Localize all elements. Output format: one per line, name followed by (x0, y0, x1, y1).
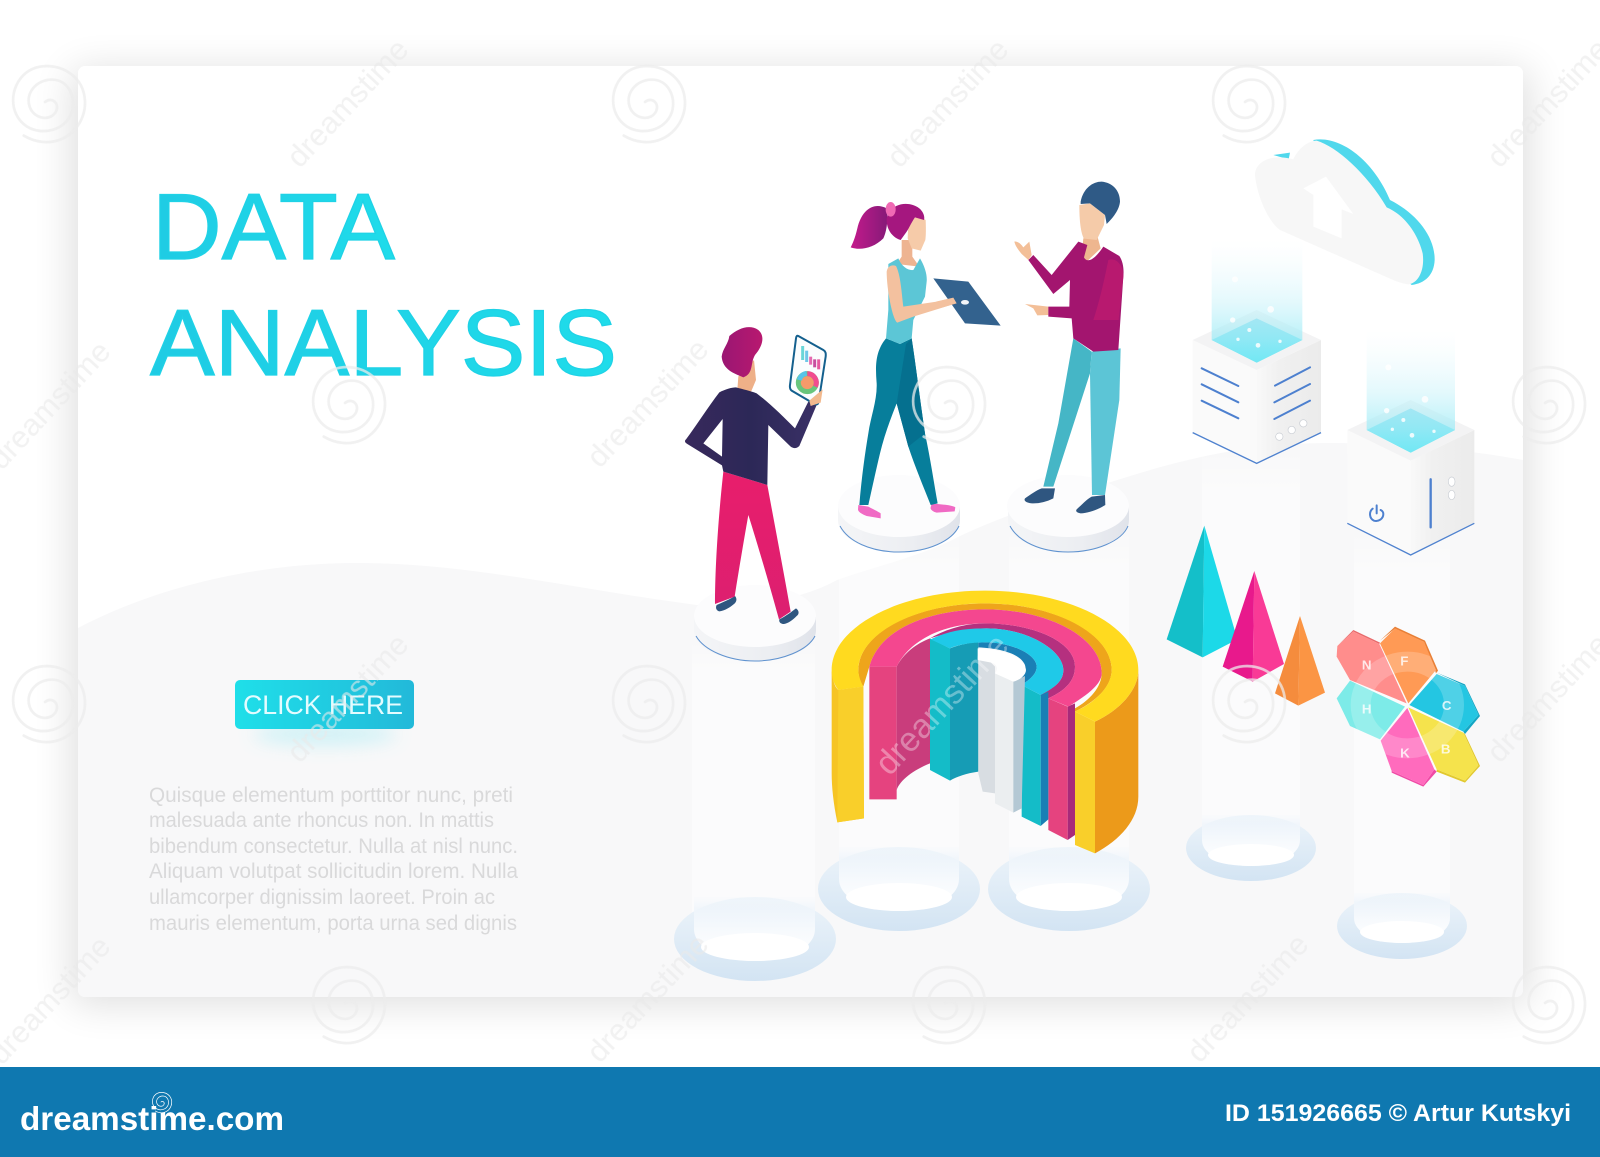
opening and beam (1212, 240, 1302, 363)
hexagon letters: H (1362, 701, 1371, 716)
footer banner (0, 1067, 1600, 1157)
ring: back orange band (858, 603, 1112, 712)
people illustration (685, 182, 1124, 624)
hexagon letters: K (1400, 746, 1410, 761)
chart: cylindrical ring chart (832, 591, 1138, 853)
hexagon side edges (1337, 627, 1480, 787)
watermark text: dreamstime (579, 927, 715, 1069)
icon: upload cloud (1255, 139, 1435, 285)
hexagon letters: F (1400, 653, 1408, 668)
ring: cyan (930, 628, 1063, 826)
watermark text: dreamstime (879, 32, 1015, 174)
text block: body copy: malesuada ante rhoncus non. In mattis (149, 808, 494, 832)
watermark text: dreamstime (279, 32, 415, 174)
title line: ANALYSIS: ANALYSIS (150, 290, 617, 395)
dark sweater (685, 387, 817, 485)
text block: body copy: bibendum consectetur. Nulla at nisl nunc. (149, 834, 518, 858)
watermark text: dreamstime (1179, 927, 1315, 1069)
text block: body copy (149, 783, 518, 935)
ring: yellow outer (832, 591, 1138, 853)
base ring 3 (988, 847, 1150, 931)
pyramid: orange (1275, 616, 1325, 706)
hexagon letters: N (1362, 657, 1371, 672)
person: man gesturing (1014, 182, 1124, 513)
title line: DATA: DATA (152, 174, 395, 279)
base ring 2 (818, 847, 980, 931)
card shadow (72, 70, 1529, 1004)
text block: body copy: ullamcorper dignissim laoreet. Proin ac (149, 885, 495, 909)
text block: body copy: mauris elementum, porta urna sed dignis (149, 911, 517, 935)
server: with power icon (1347, 330, 1474, 555)
background columns (692, 450, 1450, 930)
pyramid: teal (1167, 526, 1237, 657)
text block: body copy: Quisque elementum porttitor nunc, preti (149, 783, 513, 807)
ring: white centre (978, 648, 1026, 813)
brand spiral icon (152, 1092, 172, 1113)
button: click here (235, 680, 414, 745)
watermark text: dreamstime (279, 627, 415, 769)
base ring 5 (1337, 893, 1467, 959)
hexagon letters: C (1442, 698, 1452, 713)
button: click here: CLICK HERE (243, 690, 403, 720)
text block: body copy: Aliquam volutpat sollicitudin lorem. Nulla (149, 859, 518, 883)
watermark over chart: dreamstime (867, 627, 1016, 782)
brand wordmark: dreamstime.com (20, 1100, 284, 1137)
platform 1 (694, 585, 816, 661)
person: man with tablet (685, 327, 826, 624)
base ring 4 (1186, 815, 1316, 881)
image credit: ID 151926665 © Artur Kutskyi (1225, 1100, 1571, 1127)
hexagon letters (1362, 653, 1452, 761)
hexagon lighter band (1361, 662, 1454, 748)
background wave (78, 443, 1523, 997)
platform 2 (838, 475, 960, 552)
opening and beam (1367, 330, 1455, 453)
title (150, 174, 617, 395)
pyramid: magenta (1223, 571, 1284, 682)
watermark text: dreamstime (579, 332, 715, 474)
chart: hexagon petals (1337, 627, 1480, 787)
icon: power (1370, 505, 1383, 521)
person: woman with laptop (851, 202, 1001, 518)
base ring 1 (674, 897, 836, 981)
icon: upload arrow (1303, 177, 1353, 238)
server: with lines (1193, 240, 1321, 463)
ring: pink (869, 609, 1102, 840)
panel: landing page card (78, 66, 1523, 997)
hexagon letters: B (1441, 741, 1451, 756)
pyramids and hexagon chart (1167, 526, 1480, 787)
platform 3 (1007, 475, 1129, 552)
